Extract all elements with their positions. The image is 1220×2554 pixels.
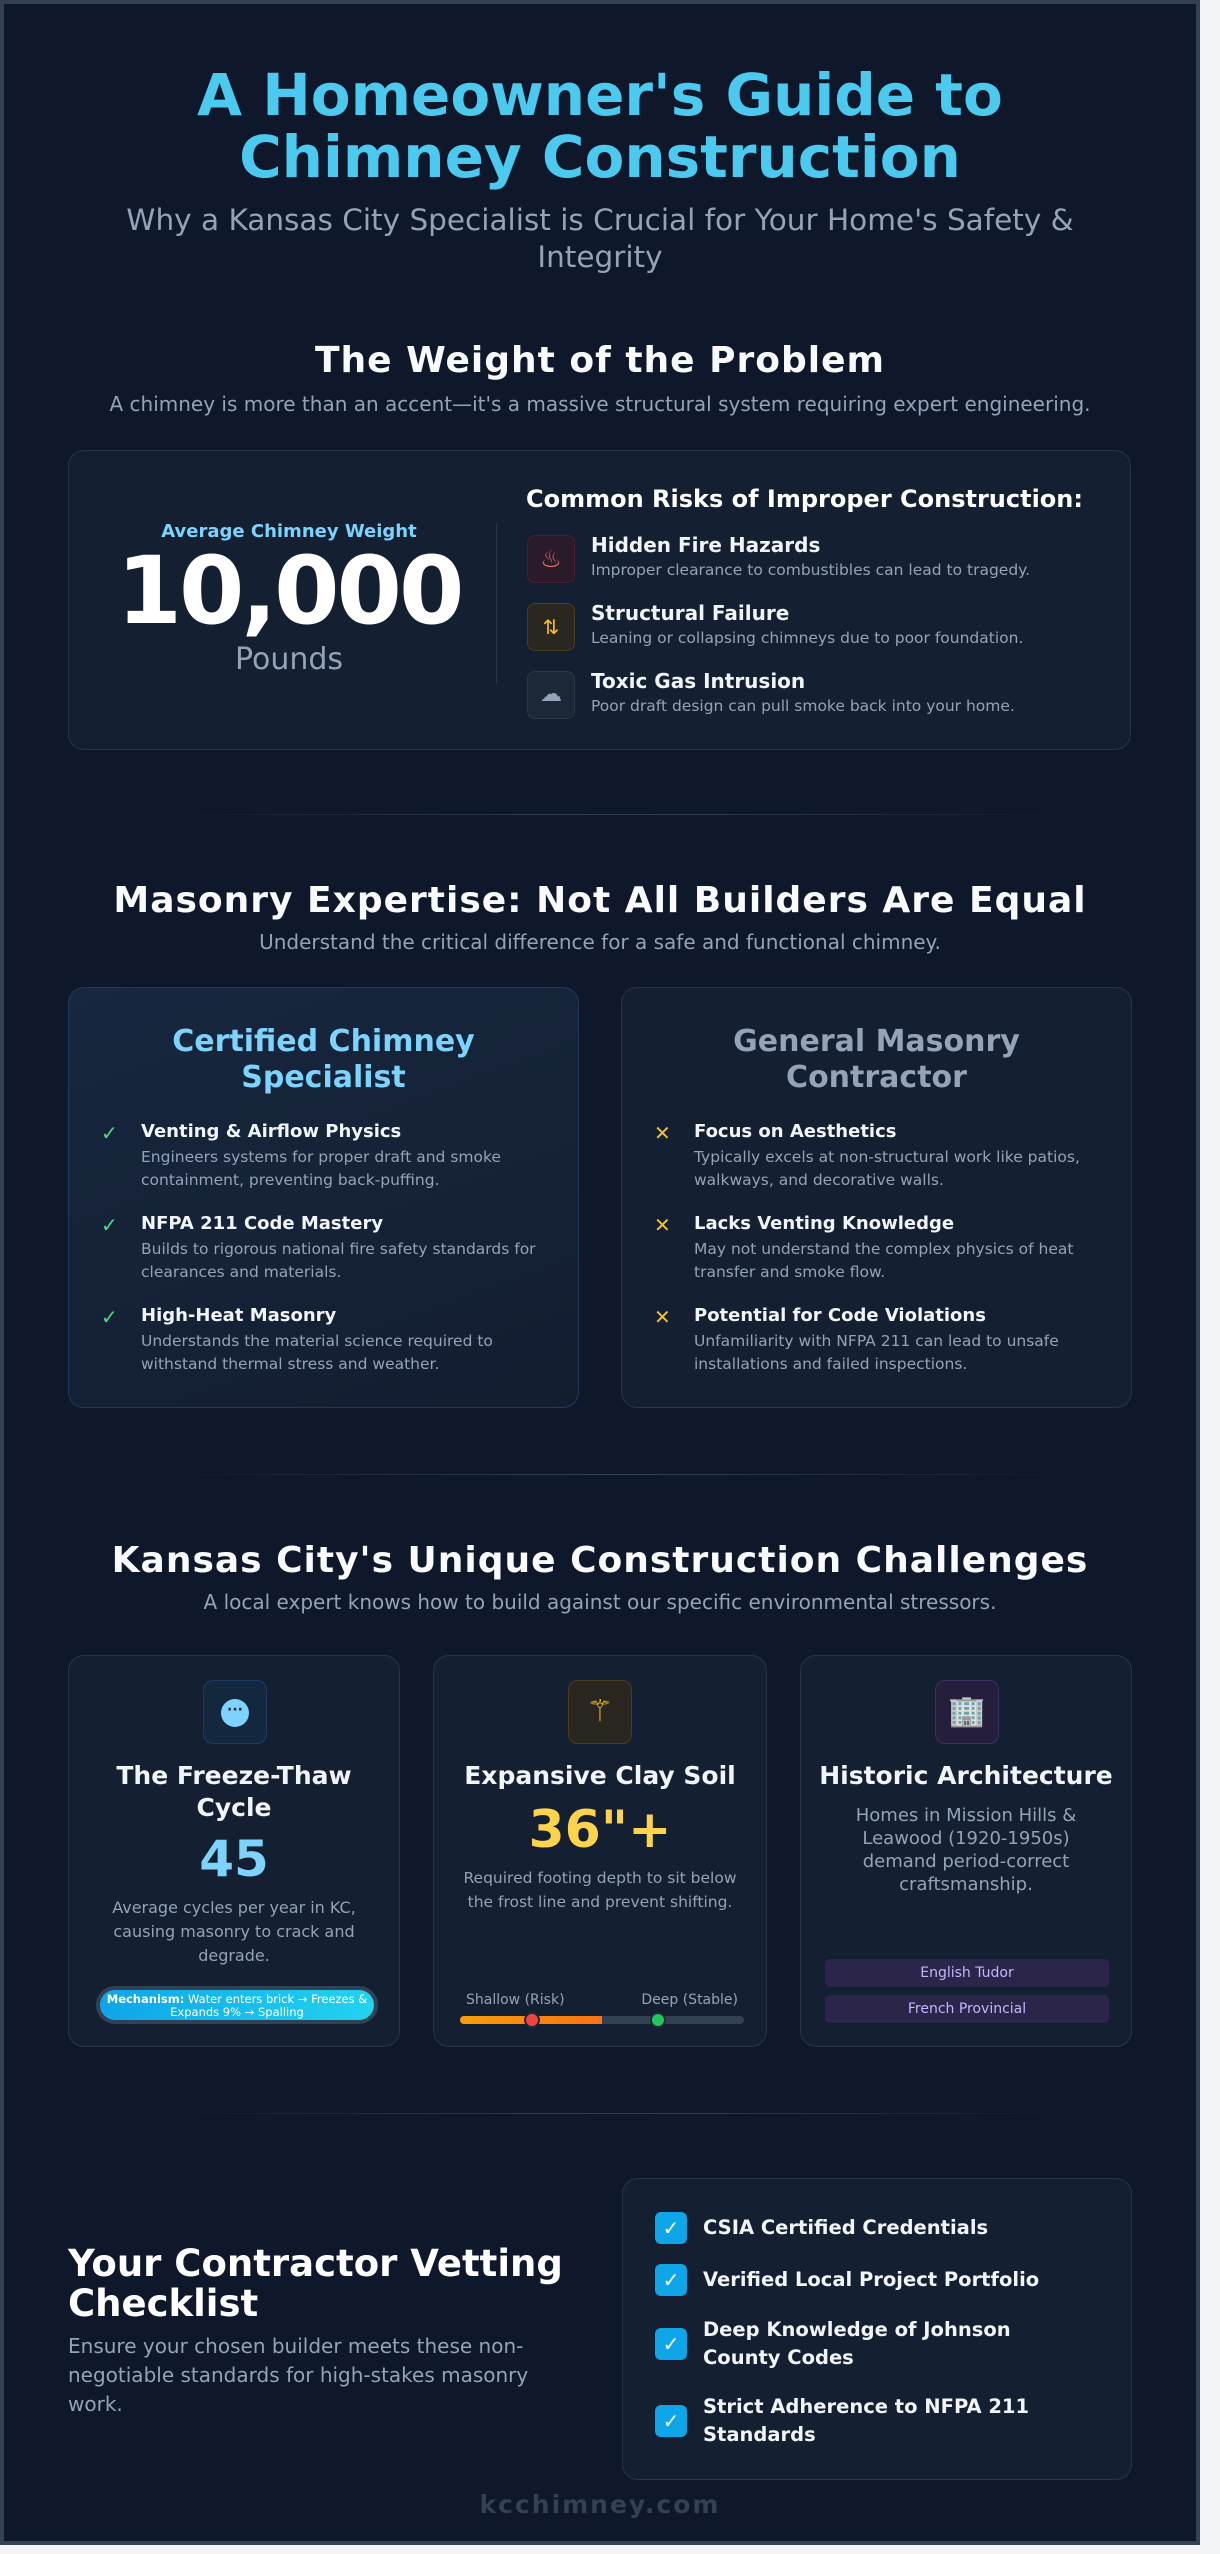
panel title <box>733 1024 1020 1095</box>
check item <box>655 2318 1011 2369</box>
chart: depth gauge: Shallow (Risk) <box>466 1992 565 2008</box>
item: Builds to rigorous national fire safety standards for clearances and materials. <box>141 1240 536 1281</box>
heading: masonry expertise: Masonry Expertise: Not All Builders Are Equal <box>113 880 1087 921</box>
callout: mechanism <box>96 1986 378 2024</box>
item <box>654 1213 1074 1281</box>
footer: kcchimney.com <box>480 2490 720 2519</box>
title: Historic Architecture <box>819 1761 1113 1790</box>
check item: ✓ <box>663 2332 679 2356</box>
item: Typically excels at non-structural work like patios, walkways, and decorative walls. <box>694 1148 1080 1189</box>
check item: County Codes <box>703 2346 854 2369</box>
item: May not understand the complex physics of heat transfer and smoke flow. <box>694 1240 1073 1281</box>
risk: toxic gas: Toxic Gas Intrusion <box>591 669 805 693</box>
subheading: A local expert knows how to build against our specific environmental stressors. <box>204 1590 996 1614</box>
check item: CSIA Certified Credentials <box>703 2216 988 2239</box>
check item <box>655 2395 1029 2446</box>
risk: toxic gas: Poor draft design can pull smoke back into your home. <box>591 697 1015 715</box>
risk: fire <box>527 533 1030 583</box>
icon: snow <box>203 1680 267 1744</box>
check item: Verified Local Project Portfolio <box>703 2268 1039 2291</box>
item: Understands the material science required to withstand thermal stress and weather. <box>141 1332 493 1373</box>
item: Lacks Venting Knowledge <box>694 1213 954 1234</box>
callout: mechanism: Mechanism: Water enters brick → Freezes & Expands 9% → Spalling <box>107 1992 367 2019</box>
subtitle: Integrity <box>537 240 663 274</box>
panel: freeze-thaw <box>68 1655 400 2047</box>
panel: general contractor <box>621 987 1132 1408</box>
risk: fire: Hidden Fire Hazards <box>591 533 820 557</box>
item: Engineers systems for proper draft and smoke containment, preventing back-puffing. <box>141 1148 501 1189</box>
subtitle <box>126 203 1074 274</box>
check item <box>655 2264 1039 2296</box>
stat: 45 <box>199 1830 269 1888</box>
icon: soil: ⚚ <box>587 1694 613 1729</box>
stat: chimney weight: Average Chimney Weight <box>161 521 417 542</box>
panel: weight & risks <box>68 450 1131 750</box>
risk: fire: Improper clearance to combustibles can lead to tragedy. <box>591 561 1030 579</box>
title: Cycle <box>196 1793 272 1822</box>
icon: arrows: ⇅ <box>543 615 559 639</box>
chart: depth gauge <box>460 1992 744 2028</box>
panel: certified specialist <box>68 987 579 1408</box>
item: Venting & Airflow Physics <box>141 1121 401 1142</box>
panel title: Certified Chimney <box>172 1024 475 1059</box>
check item <box>655 2212 988 2244</box>
risk: structural <box>527 601 1023 651</box>
text: checklist intro: Ensure your chosen builder meets these non-negotiable standards for high-stakes masonry work. <box>68 2334 528 2416</box>
item: Potential for Code Violations <box>694 1305 986 1326</box>
subtitle: Why a Kansas City Specialist is Crucial for Your Home's Safety & <box>126 203 1074 237</box>
description: Homes in Mission Hills & Leawood (1920-1950s) demand period-correct craftsmanship. <box>856 1805 1076 1895</box>
tag: French Provincial <box>908 2001 1026 2017</box>
icon: building: 🏢 <box>948 1694 986 1729</box>
title: Expansive Clay Soil <box>464 1761 736 1790</box>
panel title <box>172 1024 475 1095</box>
item: ✕ <box>654 1305 671 1329</box>
subheading: A chimney is more than an accent—it's a massive structural system requiring expert engineering. <box>110 392 1090 416</box>
item: High-Heat Masonry <box>141 1305 336 1326</box>
icon: arrows <box>527 603 575 651</box>
item: Focus on Aesthetics <box>694 1121 896 1142</box>
item: ✕ <box>654 1121 671 1145</box>
title <box>116 1761 352 1822</box>
item: ✓ <box>101 1121 118 1145</box>
item: ✓ <box>101 1305 118 1329</box>
item: Unfamiliarity with NFPA 211 can lead to unsafe installations and failed inspections. <box>694 1332 1059 1373</box>
tag <box>825 1995 1109 2023</box>
icon: snow: ··· <box>227 1702 243 1718</box>
check item: ✓ <box>663 2268 679 2292</box>
item <box>654 1305 1059 1373</box>
panel: clay soil <box>433 1655 767 2047</box>
panel: historic architecture <box>800 1655 1132 2047</box>
panel title: General Masonry <box>733 1024 1020 1059</box>
panel title: Specialist <box>241 1060 406 1095</box>
heading: weight of the problem: The Weight of the Problem <box>315 340 885 381</box>
subheading: Understand the critical difference for a safe and functional chimney. <box>259 930 941 954</box>
tag <box>825 1959 1109 1987</box>
check item: ✓ <box>663 2216 679 2240</box>
icon: cloud <box>527 671 575 719</box>
tag: English Tudor <box>920 1965 1014 1981</box>
item <box>101 1213 536 1281</box>
check item: Strict Adherence to NFPA 211 <box>703 2395 1029 2418</box>
item <box>101 1305 493 1373</box>
risk: structural: Leaning or collapsing chimneys due to poor foundation. <box>591 629 1023 647</box>
check item: Deep Knowledge of Johnson <box>703 2318 1011 2341</box>
chart: depth gauge: Deep (Stable) <box>641 1992 738 2008</box>
panel title: Contractor <box>786 1060 967 1095</box>
heading: common risks: Common Risks of Improper Construction: <box>526 485 1083 513</box>
item: NFPA 211 Code Mastery <box>141 1213 383 1234</box>
check item: Standards <box>703 2423 816 2446</box>
heading: KC challenges: Kansas City's Unique Construction Challenges <box>112 1540 1088 1581</box>
risk: structural: Structural Failure <box>591 601 789 625</box>
icon: soil <box>568 1680 632 1744</box>
description: Average cycles per year in KC, causing masonry to crack and degrade. <box>112 1898 356 1965</box>
icon: flame <box>527 535 575 583</box>
title: The Freeze-Thaw <box>116 1761 352 1790</box>
icon: flame: ♨ <box>540 545 562 573</box>
stat: 36"+ <box>528 1800 672 1860</box>
item: ✓ <box>101 1213 118 1237</box>
item: ✕ <box>654 1213 671 1237</box>
title: A Homeowner's Guide to <box>197 61 1003 129</box>
title: Chimney Construction <box>239 123 961 191</box>
description: Required footing depth to sit below the frost line and prevent shifting. <box>463 1869 737 1911</box>
item <box>654 1121 1080 1189</box>
panel: checklist <box>622 2178 1132 2480</box>
icon: building <box>935 1680 999 1744</box>
heading: vetting checklist: Your Contractor Vetting Checklist <box>68 2242 563 2325</box>
stat: chimney weight: 10,000 <box>117 537 461 646</box>
check item: ✓ <box>663 2409 679 2433</box>
stat: chimney weight <box>117 521 461 677</box>
item <box>101 1121 501 1189</box>
risk: toxic gas <box>527 669 1015 719</box>
title <box>197 61 1003 191</box>
stat: chimney weight: Pounds <box>235 642 343 677</box>
icon: cloud: ☁ <box>540 682 562 707</box>
